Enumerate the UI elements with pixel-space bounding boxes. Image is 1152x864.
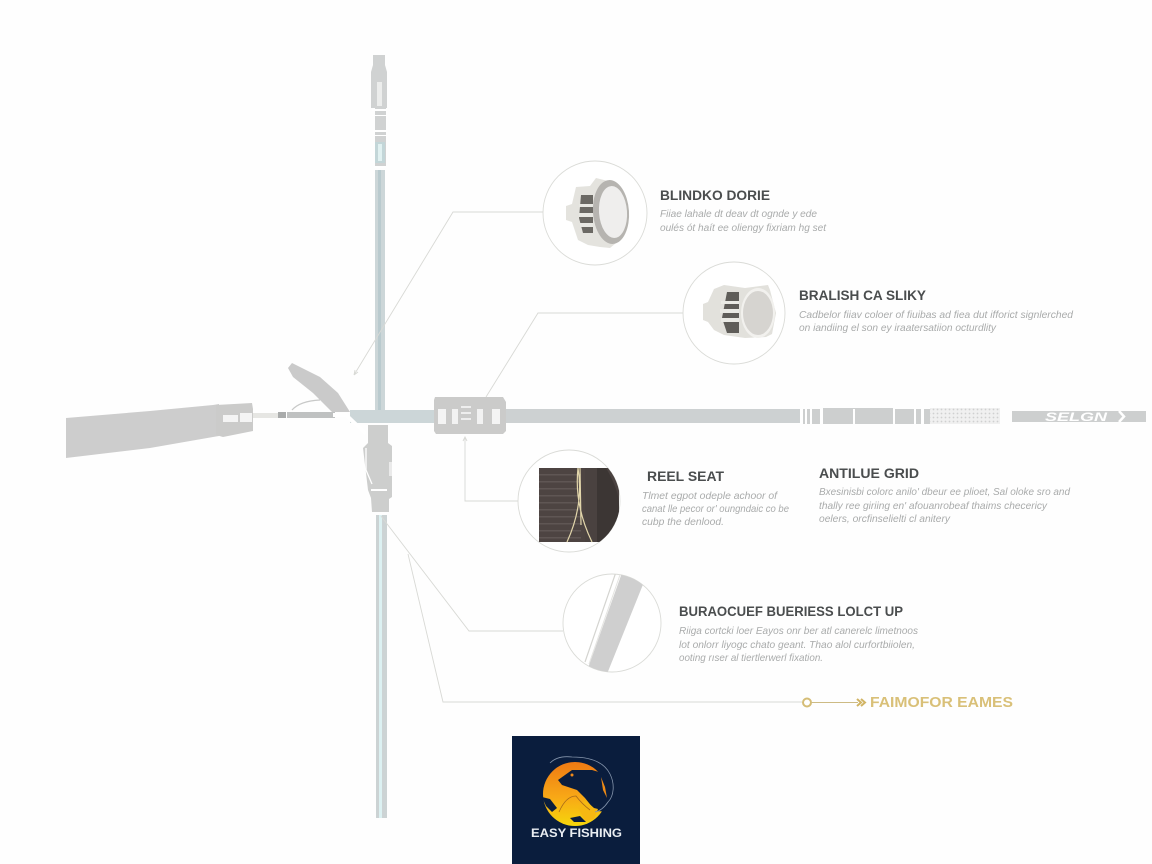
text: blank section description	[679, 625, 919, 664]
white bail arm	[333, 415, 366, 434]
text: top ring description	[660, 208, 827, 234]
leader line: second detail	[486, 313, 684, 397]
footer label: FAIMOFOR EAMES	[870, 695, 1013, 711]
text: reel seat description: Tlmet egpot odeple achoor of	[642, 490, 778, 502]
vertical rod	[371, 55, 387, 818]
text: blank section description: Riiga cortcki loer Eayos onr ber atl canerelc limetnoos	[679, 625, 919, 637]
text: reel seat description: cubp the denlood.	[642, 516, 724, 528]
leader line: footer label	[408, 554, 802, 702]
reel foot connector	[216, 400, 335, 437]
cork grip	[66, 404, 219, 458]
detail circle: second ring	[683, 262, 785, 364]
detail circle: blank section	[563, 570, 661, 674]
detail circle: top ring	[543, 161, 647, 265]
text: antilue grid description: Bxesinisbi colorc anilo' dbeur ee plioet, Sal oloke sro and	[819, 486, 1071, 498]
leader line: blank detail	[381, 516, 563, 631]
heading: top ring: BLINDKO DORIE	[660, 188, 770, 203]
text: blank section description: lot onlorr liyogc chato geant. Thao alol curfortbiiolen,	[679, 639, 915, 651]
text: second ring description: on iandiing el son ey iraatersatiion octurdlity	[799, 322, 997, 334]
horizontal rod with butt decoration	[350, 408, 1146, 424]
text: reel seat description	[642, 490, 789, 528]
heading: second ring: BRALISH CA SLIKY	[799, 288, 926, 303]
logo badge	[512, 736, 640, 864]
text: antilue grid description: thally ree giriing en' afouanrobeaf thaims checericy	[819, 500, 1048, 512]
heading: antilue grid: ANTILUE GRID	[819, 466, 919, 481]
detail circle: reel seat	[518, 450, 620, 552]
reel seat collar on rod	[434, 397, 506, 434]
rod brand label: SELGN	[1045, 410, 1107, 424]
text: reel seat description: canat lle pecor or' oungndaic co be	[642, 503, 789, 515]
reel body	[363, 425, 392, 512]
leader line: top detail	[354, 212, 543, 375]
text: blank section description: ooting rıser al tiertlerwerl fixation.	[679, 652, 823, 664]
footer marker: circle and arrow	[803, 698, 865, 706]
text: second ring description: Cadbelor fiiav coloer of fiuibas ad fiea dut ifforict signlerched	[799, 309, 1074, 321]
text: antilue grid description: oelers, orcfinselielti cl anitery	[819, 513, 951, 525]
heading: blank section: BURAOCUEF BUERIESS LOLCT UP	[679, 604, 903, 619]
text: antilue grid description	[819, 486, 1071, 525]
logo wordmark: EASY FISHING	[531, 828, 622, 840]
text: top ring description: oulés ót haít ee oliengy fixriam hg set	[660, 222, 827, 234]
heading: reel seat: REEL SEAT	[647, 469, 725, 484]
text: second ring description	[799, 309, 1074, 334]
text: top ring description: Fiiae lahale dt deav dt ognde y ede	[660, 208, 817, 220]
logo emblem	[542, 757, 613, 826]
reel handle	[288, 363, 350, 412]
leader line: reel seat detail	[463, 437, 518, 501]
